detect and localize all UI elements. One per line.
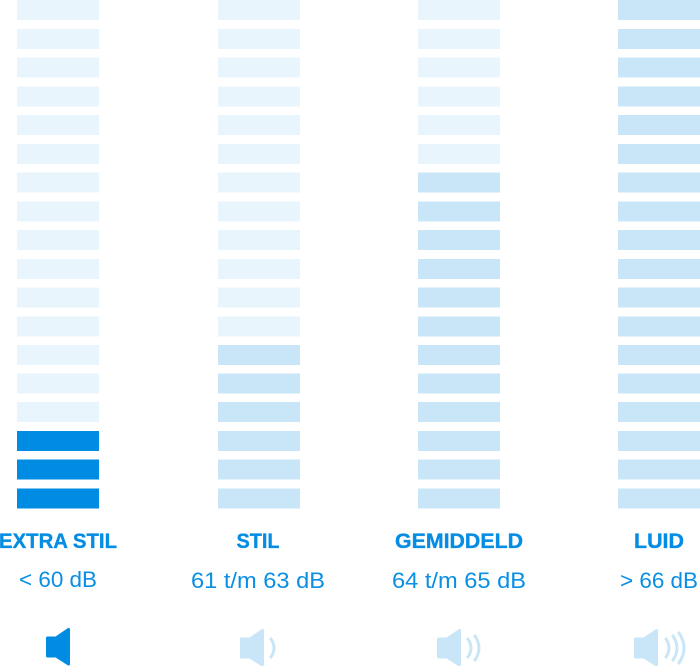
icon: speaker medium volume (438, 630, 479, 665)
heading: luid: LUID (634, 529, 684, 553)
range: stil: 61 t/m 63 dB (191, 568, 325, 593)
range: extra stil: < 60 dB (19, 567, 97, 592)
bar meter: gemiddeld (418, 0, 500, 508)
panel: luid column (618, 0, 700, 665)
panel: stil column (191, 0, 325, 665)
bar meter: stil (218, 0, 300, 508)
icon: speaker muted (48, 630, 68, 664)
bar meter: extra stil (17, 0, 99, 508)
heading: extra stil: EXTRA STIL (0, 529, 117, 553)
icon: speaker low volume (242, 630, 274, 665)
panel: extra stil column (0, 0, 117, 664)
heading: stil: STIL (236, 529, 280, 553)
icon: speaker high volume (636, 630, 684, 665)
heading: gemiddeld: GEMIDDELD (395, 529, 523, 553)
panel: gemiddeld column (392, 0, 526, 665)
range: luid: > 66 dB (620, 568, 698, 593)
range: gemiddeld: 64 t/m 65 dB (392, 568, 526, 593)
bar meter: luid (618, 0, 700, 508)
